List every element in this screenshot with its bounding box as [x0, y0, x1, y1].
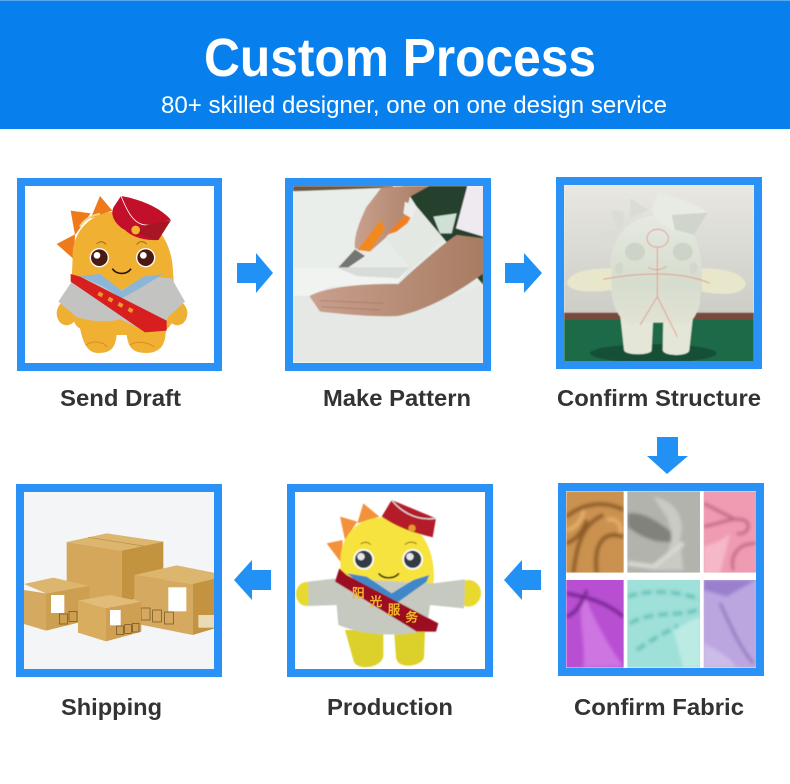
sash lettering [352, 586, 418, 625]
arrow: down to confirm fabric [647, 437, 688, 474]
step 4 label: Confirm Fabric [574, 694, 744, 720]
arrow: left to shipping [234, 560, 271, 600]
step 5: production panel [291, 488, 489, 673]
panel frame [21, 182, 218, 367]
step 1 label: Send Draft [60, 385, 181, 411]
step 1: send draft panel [21, 182, 218, 367]
step 3: confirm structure panel [560, 181, 758, 365]
icon: cartoon mascot drawing [57, 196, 187, 353]
header banner [0, 0, 790, 129]
right box [134, 565, 217, 584]
swatch: tan fabric [566, 491, 624, 573]
photo: foam mascot structure [564, 185, 754, 363]
panel frame [20, 488, 218, 673]
step 3 label: Confirm Structure [557, 385, 761, 411]
fabric swatches grid [563, 488, 758, 670]
step 2: make pattern panel [289, 182, 487, 367]
panel frame [291, 488, 489, 673]
big box [67, 533, 163, 551]
left box [24, 578, 89, 593]
swatch: teal fabric [627, 580, 700, 668]
title: Custom Process [204, 28, 596, 88]
photo: finished mascot costume [296, 500, 481, 667]
panel frame [289, 182, 487, 367]
sash lettering: 阳 [352, 586, 365, 600]
subtitle: 80+ skilled designer, one on one design service [161, 92, 667, 119]
panel frame [562, 487, 760, 672]
arrow: right to confirm structure [505, 253, 542, 293]
step 6 label: Shipping [61, 694, 162, 720]
step 4: confirm fabric panel [562, 487, 760, 672]
panel frame [560, 181, 758, 365]
sash lettering: 服 [388, 603, 401, 617]
front box [78, 595, 141, 608]
icon: cardboard boxes [24, 533, 217, 641]
swatch: purple fabric [566, 580, 624, 668]
arrow: right to make pattern [237, 253, 273, 293]
swatch: pink fabric [704, 491, 756, 573]
step 2 label: Make Pattern [323, 385, 471, 411]
sash lettering: 光 [369, 594, 383, 609]
step 6: shipping panel [20, 488, 218, 673]
swatch: lavender fabric [704, 580, 756, 668]
sash lettering: 务 [405, 610, 418, 625]
step 5 label: Production [327, 694, 453, 720]
photo: hands cutting white cloth [293, 186, 483, 363]
arrow: left to production [504, 560, 541, 600]
swatch: grey fabric [627, 491, 700, 573]
